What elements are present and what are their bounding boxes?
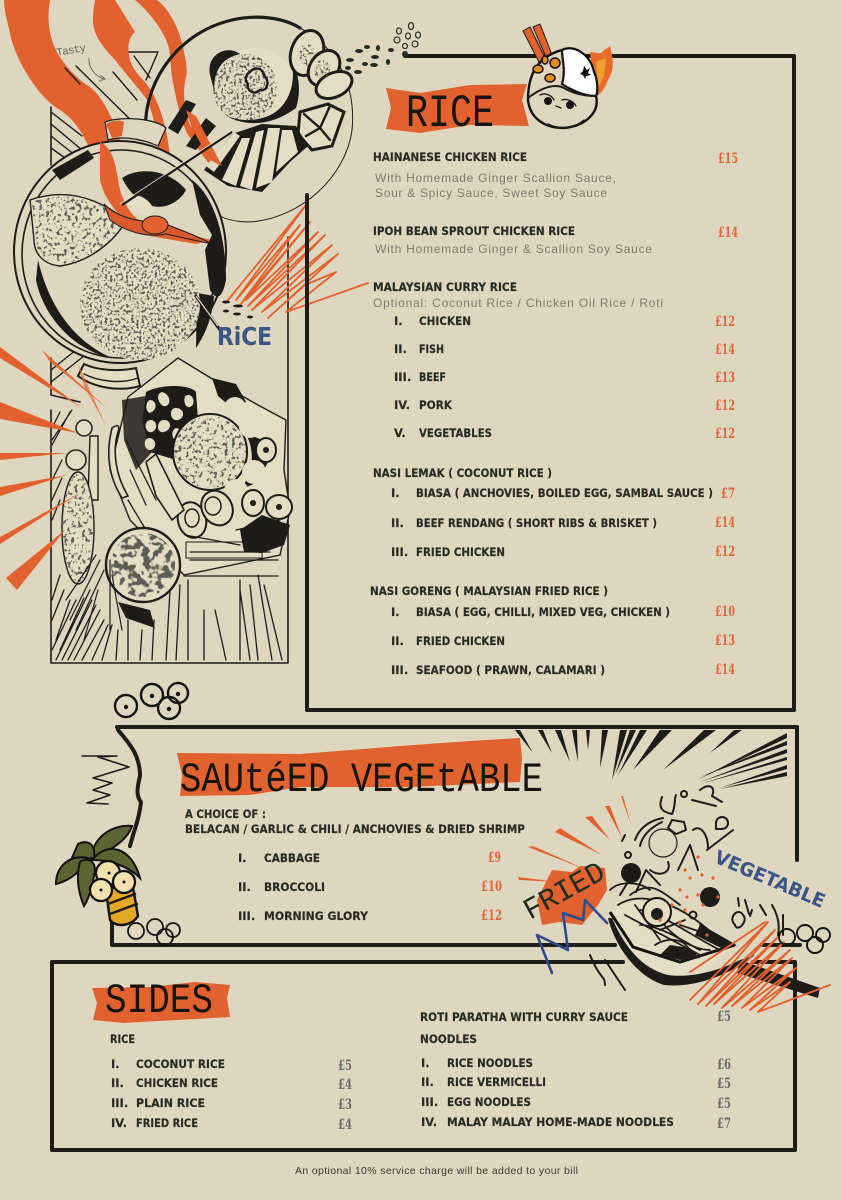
menu section: Nasi lemak: BIASA ( ANCHOVIES, BOILED EGG, SAMBAL SAUCE )	[416, 486, 713, 500]
label: blue VEGETABLE: VEGETABLE	[711, 846, 828, 913]
menu list: rice sides: £4	[338, 1117, 352, 1133]
flying ingredients	[621, 863, 641, 883]
fanned slices	[168, 100, 308, 192]
dark food patches	[142, 386, 198, 460]
menu section: Malaysian curry rice	[373, 280, 735, 442]
menu section: Malaysian curry rice: IV.	[394, 398, 410, 412]
menu section: Malaysian curry rice: II.	[394, 342, 407, 356]
menu section: Nasi lemak: £7	[721, 486, 735, 502]
menu list: vegetables: £12	[481, 908, 502, 924]
orange scribble	[228, 205, 368, 318]
panel: food illustration frame	[51, 52, 288, 663]
menu section: Malaysian curry rice: VEGETABLES	[419, 426, 492, 440]
text: sauce choices	[185, 807, 525, 836]
icon: rice bowl mascot	[523, 24, 613, 128]
menu list: rice sides: II.	[111, 1076, 124, 1090]
text: sauce choices: BELACAN / GARLIC & CHILI / ANCHOVIES & DRIED SHRIMP	[185, 822, 525, 836]
illustration: rice plate	[146, 17, 356, 222]
icon: palm tree	[56, 826, 140, 925]
heading banner: sauteed vegetable: SAUtéED VEGEtABLE	[180, 756, 543, 804]
blue zigzag	[537, 900, 607, 973]
menu section: Malaysian curry rice: £12	[715, 398, 735, 414]
heading banner: RICE: RICE	[406, 88, 494, 140]
anchovies and peanuts	[145, 392, 194, 450]
orange burst rays	[0, 347, 107, 590]
orange rays above wok	[518, 796, 631, 882]
heading banner: sauteed vegetable	[177, 738, 543, 804]
rice grain specks	[222, 300, 253, 318]
menu section: Malaysian curry rice: CHICKEN	[419, 314, 471, 328]
menu section: Malaysian curry rice: £12	[715, 426, 735, 442]
prawn	[104, 204, 212, 244]
text: sauce choices: A CHOICE OF :	[185, 807, 266, 821]
menu list: rice sides: £5	[338, 1058, 352, 1074]
handle	[737, 960, 820, 998]
dark pan interior	[122, 171, 186, 207]
chopstick	[122, 132, 232, 205]
platter outline	[110, 358, 290, 575]
menu section: Nasi goreng: III.	[391, 663, 408, 677]
menu section: Hainanese chicken rice	[373, 150, 738, 200]
cucumber slices	[285, 26, 356, 104]
menu list: vegetables: CABBAGE	[264, 851, 320, 865]
icon: peas at panel corner	[128, 919, 180, 945]
menu section: Malaysian curry rice: BEEF	[419, 370, 446, 384]
menu list: rice sides	[110, 1032, 352, 1133]
menu list: roti and noodles: I.	[421, 1056, 430, 1070]
coconut rice mound	[173, 414, 247, 490]
menu list: rice sides: I.	[111, 1057, 120, 1071]
menu section: Ipoh bean sprout chicken rice	[373, 224, 738, 256]
menu list: rice sides: FRIED RICE	[136, 1116, 198, 1130]
rice mound	[80, 248, 200, 360]
menu list: rice sides: £3	[338, 1097, 352, 1113]
panel: sauteed vegetable frame	[112, 727, 800, 945]
menu list: rice sides: CHICKEN RICE	[136, 1076, 218, 1090]
menu section: Malaysian curry rice: V.	[394, 426, 406, 440]
illustration: wok with flying food	[590, 786, 820, 998]
menu list: vegetables: £9	[488, 850, 501, 866]
fried chicken and cucumber sticks	[146, 454, 184, 520]
menu list: roti and noodles: ROTI PARATHA WITH CURRY SAUCE	[420, 1010, 628, 1024]
menu list: rice sides: IV.	[111, 1116, 127, 1130]
menu list: roti and noodles: NOODLES	[420, 1032, 477, 1046]
menu list: roti and noodles: II.	[421, 1075, 434, 1089]
orange scribble under wok	[690, 922, 830, 1012]
menu section: Malaysian curry rice: £13	[715, 370, 735, 386]
panel: rice menu frame	[307, 56, 794, 710]
menu list: roti and noodles: £5	[717, 1096, 731, 1112]
menu list: roti and noodles: £6	[717, 1057, 731, 1073]
heading banner: SIDES: SIDES	[105, 977, 213, 1025]
menu list: rice sides: £4	[338, 1077, 352, 1093]
menu list: roti and noodles	[420, 1009, 731, 1132]
menu section: Nasi goreng: NASI GORENG ( MALAYSIAN FRIED RICE )	[370, 584, 608, 598]
menu section: Ipoh bean sprout chicken rice: With Homemade Ginger & Scallion Soy Sauce	[375, 242, 652, 256]
menu list: vegetables: MORNING GLORY	[264, 909, 369, 923]
orange sparks	[658, 855, 720, 937]
menu list: roti and noodles: £7	[717, 1116, 731, 1132]
menu section: Hainanese chicken rice: £15	[718, 151, 738, 167]
menu list: vegetables: I.	[238, 851, 247, 865]
cucumber slices	[256, 438, 276, 462]
menu list: roti and noodles: IV.	[421, 1115, 437, 1129]
menu section: Malaysian curry rice: MALAYSIAN CURRY RICE	[373, 280, 517, 294]
label: FRIED: FRIED	[518, 856, 612, 929]
lower pan handle	[78, 364, 140, 389]
noodles and food in wok	[610, 883, 735, 955]
brush: orange behind FRIED	[537, 866, 607, 925]
label: blue RICE: RiCE	[217, 322, 272, 351]
hatching: floor lines	[52, 410, 282, 660]
footer note: An optional 10% service charge will be added to your bill	[295, 1165, 578, 1177]
menu list: roti and noodles: EGG NOODLES	[447, 1095, 531, 1109]
menu section: Nasi goreng: £14	[715, 662, 735, 678]
menu section: Nasi lemak: NASI LEMAK ( COCONUT RICE )	[373, 466, 552, 480]
menu section: Nasi goreng: FRIED CHICKEN	[416, 634, 505, 648]
menu section: Nasi goreng: £10	[715, 604, 735, 620]
menu section: Hainanese chicken rice: HAINANESE CHICKEN RICE	[373, 150, 527, 164]
menu section: Nasi lemak: III.	[391, 545, 408, 559]
pan handle orange	[105, 119, 166, 146]
peas beside wok	[779, 925, 830, 953]
menu list: roti and noodles: MALAY MALAY HOME-MADE NOODLES	[447, 1115, 674, 1129]
menu list: rice sides: PLAIN RICE	[136, 1096, 205, 1110]
menu section: Hainanese chicken rice: With Homemade Ginger Scallion Sauce,	[375, 171, 616, 185]
menu section: Nasi lemak: II.	[391, 516, 404, 530]
mound of rice	[215, 48, 295, 122]
menu section: Ipoh bean sprout chicken rice: £14	[718, 225, 738, 241]
label: Tasty	[56, 43, 105, 81]
menu section: Ipoh bean sprout chicken rice: IPOH BEAN SPROUT CHICKEN RICE	[373, 224, 575, 238]
icon: zigzag spring	[82, 756, 129, 804]
menu list: roti and noodles: RICE NOODLES	[447, 1056, 533, 1070]
menu list: roti and noodles: £5	[717, 1009, 731, 1025]
fish	[30, 195, 126, 266]
menu list: vegetables: BROCCOLI	[264, 880, 325, 894]
illustration: pan with fish and rice	[14, 119, 232, 389]
orange smoke ribbons	[4, 0, 222, 183]
leaves below bowl	[118, 602, 155, 628]
menu section: Hainanese chicken rice: Sour & Spicy Sauce, Sweet Soy Sauce	[375, 186, 607, 200]
menu list: roti and noodles: RICE VERMICELLI	[447, 1075, 546, 1089]
menu section: Nasi goreng: I.	[391, 605, 400, 619]
menu list: rice sides: COCONUT RICE	[136, 1057, 225, 1071]
menu section: Nasi lemak: I.	[391, 486, 400, 500]
menu list: roti and noodles: III.	[421, 1095, 438, 1109]
grain specks near frame corner	[345, 22, 420, 74]
wok body	[610, 901, 735, 975]
menu section: Malaysian curry rice: £12	[715, 314, 735, 330]
menu section: Nasi goreng	[370, 584, 735, 678]
menu section: Malaysian curry rice: PORK	[419, 398, 453, 412]
boiled eggs	[174, 499, 210, 541]
garnish circles	[224, 397, 246, 419]
lime wedge	[298, 104, 344, 150]
menu list: vegetables: III.	[238, 909, 255, 923]
icon: peas above saute panel	[115, 683, 188, 719]
menu section: Nasi goreng: II.	[391, 634, 404, 648]
speed lines burst	[515, 730, 787, 789]
menu section: Malaysian curry rice: £14	[715, 342, 735, 358]
menu list: vegetables: £10	[481, 879, 502, 895]
menu section: Nasi lemak: £12	[715, 544, 735, 560]
menu section: Malaysian curry rice: FISH	[419, 342, 444, 356]
menu section: Nasi goreng: SEAFOOD ( PRAWN, CALAMARI )	[416, 663, 605, 677]
menu section: Malaysian curry rice: III.	[394, 370, 411, 384]
plate rim	[146, 17, 300, 132]
fish on the left	[62, 472, 94, 584]
menu section: Nasi lemak: FRIED CHICKEN	[416, 545, 505, 559]
panel: sides frame	[52, 962, 795, 1150]
menu section: Nasi goreng: BIASA ( EGG, CHILLI, MIXED VEG, CHICKEN )	[416, 605, 670, 619]
menu section: Nasi lemak	[373, 466, 735, 560]
label: Tasty: Tasty	[56, 43, 88, 60]
menu list: vegetables	[238, 850, 502, 924]
menu section: Malaysian curry rice: I.	[394, 314, 403, 328]
menu section: Nasi lemak: £14	[715, 515, 735, 531]
menu section: Malaysian curry rice: Optional: Coconut Rice / Chicken Oil Rice / Roti	[373, 296, 663, 310]
menu list: rice sides: RICE	[110, 1032, 135, 1046]
menu section: Nasi goreng: £13	[715, 633, 735, 649]
sambal bowl	[106, 528, 180, 602]
menu list: rice sides: III.	[111, 1096, 128, 1110]
menu section: Nasi lemak: BEEF RENDANG ( SHORT RIBS & BRISKET )	[416, 516, 657, 530]
menu list: vegetables: II.	[238, 880, 251, 894]
illustration: nasi lemak platter	[62, 358, 292, 640]
menu list: roti and noodles: £5	[717, 1076, 731, 1092]
